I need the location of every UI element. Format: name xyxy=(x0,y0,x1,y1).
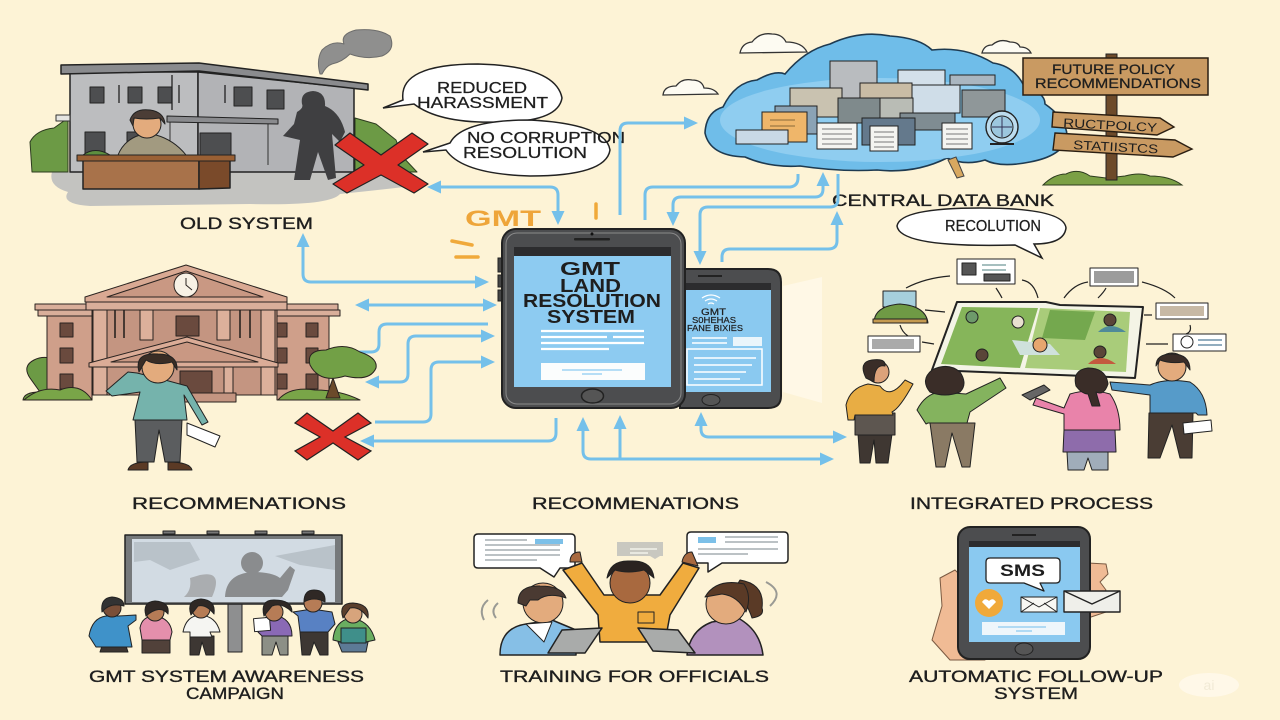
speech bubble: resolution xyxy=(897,208,1066,258)
icon: red cross xyxy=(333,133,428,193)
speech bubble: no corruption resolution: NO CORRUPTION xyxy=(467,130,625,147)
panel: old system xyxy=(30,30,428,206)
speech bubble: no corruption resolution: RESOLUTION xyxy=(463,145,587,162)
signpost: STATIISTCS xyxy=(1073,138,1158,156)
main phone: RESOLUTION xyxy=(523,291,661,311)
signpost: RUCTPOLCY xyxy=(1063,116,1158,135)
main phone: SYSTEM xyxy=(547,307,635,327)
speech bubble: reduced harassment xyxy=(383,64,562,122)
icon: small clouds xyxy=(663,34,1031,95)
people row xyxy=(89,590,375,655)
signpost xyxy=(1023,54,1208,185)
watermark: ai xyxy=(1204,677,1214,693)
label: central data bank: CENTRAL DATA BANK xyxy=(832,192,1054,210)
label: automatic follow-up xyxy=(909,668,1163,703)
icon: shadow figure xyxy=(283,91,345,180)
icon: smoke xyxy=(318,30,392,74)
icon: man on phone xyxy=(106,351,220,470)
panel: awareness campaign billboard xyxy=(89,531,375,655)
person 4 xyxy=(1110,353,1212,458)
main phone xyxy=(498,229,685,408)
panel: integrated process map xyxy=(868,259,1226,378)
main phone: GMT xyxy=(560,259,620,279)
label: awareness campaign xyxy=(89,668,364,703)
speech bubble: no corruption resolution xyxy=(423,120,625,176)
light beam xyxy=(783,277,822,403)
signpost: RECOMMENDATIONS xyxy=(1035,75,1201,91)
icon: red cross xyxy=(295,413,371,460)
label: awareness campaign: CAMPAIGN xyxy=(186,685,284,703)
signpost: FUTURE POLICY xyxy=(1052,61,1176,77)
watermark xyxy=(1179,673,1239,697)
panel: cloud data bank xyxy=(705,34,1067,178)
info cards xyxy=(868,259,1226,352)
secondary phone: FANE BIXIES xyxy=(687,323,743,333)
panel: training for officials xyxy=(474,532,788,655)
connector arrows xyxy=(303,123,844,459)
icon: tree xyxy=(309,346,376,398)
label: automatic follow-up: AUTOMATIC FOLLOW-UP xyxy=(909,668,1163,686)
people group xyxy=(846,353,1212,470)
panel: courthouse xyxy=(23,265,376,402)
icon: official at desk xyxy=(77,110,235,189)
icon: orange sparks xyxy=(452,204,596,257)
label: recommendations left: RECOMMENATIONS xyxy=(132,495,346,513)
speech bubble: reduced harassment: HARASSMENT xyxy=(417,95,549,112)
secondary phone xyxy=(680,269,781,408)
panel: automatic follow-up phone xyxy=(932,527,1120,660)
person 2 xyxy=(917,366,1006,467)
label: old system: OLD SYSTEM xyxy=(180,215,313,233)
label: automatic follow-up: SYSTEM xyxy=(994,685,1078,703)
main phone: LAND xyxy=(560,276,621,296)
speech bubble: reduced harassment: REDUCED xyxy=(437,80,527,97)
panel: automatic follow-up phone: SMS xyxy=(1000,561,1045,580)
person 1 xyxy=(846,360,913,463)
label: training: TRAINING FOR OFFICIALS xyxy=(500,668,769,686)
speech bubble: resolution: RECOLUTION xyxy=(945,218,1041,235)
person 3 xyxy=(1022,368,1120,470)
label: GMT: GMT xyxy=(465,206,542,231)
label: awareness campaign: GMT SYSTEM AWARENESS xyxy=(89,668,364,686)
secondary phone: GMT xyxy=(701,307,727,317)
label: recommendations centre: RECOMMENATIONS xyxy=(532,495,739,513)
label: integrated process: INTEGRATED PROCESS xyxy=(910,495,1153,513)
secondary phone: S0HEHAS xyxy=(692,315,736,325)
